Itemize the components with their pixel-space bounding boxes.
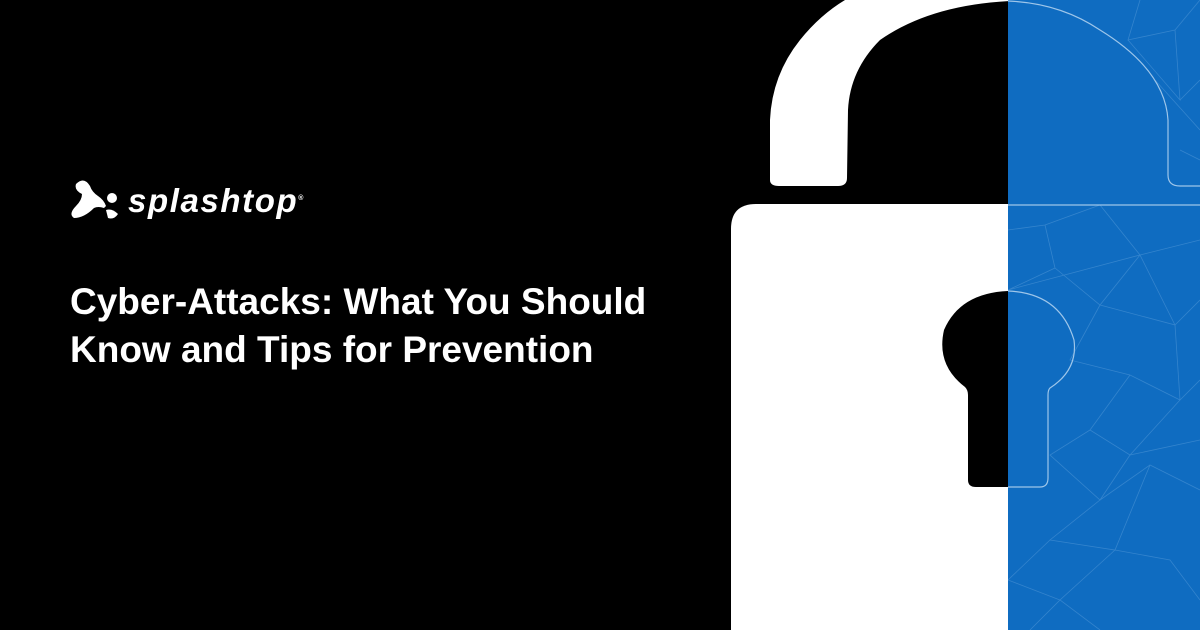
title xyxy=(70,281,646,370)
blue right panel xyxy=(1008,0,1200,630)
white lock left half xyxy=(731,0,1010,630)
icon: splash xyxy=(71,180,118,218)
body xyxy=(731,204,1010,630)
wordmark: splashtop® xyxy=(128,182,305,219)
keyhole xyxy=(942,291,1008,487)
title: Cyber-Attacks: What You Should xyxy=(70,281,646,322)
title: Know and Tips for Prevention xyxy=(70,329,594,370)
shackle xyxy=(770,0,1010,186)
logo xyxy=(71,180,305,219)
lock illustration xyxy=(731,0,1200,630)
